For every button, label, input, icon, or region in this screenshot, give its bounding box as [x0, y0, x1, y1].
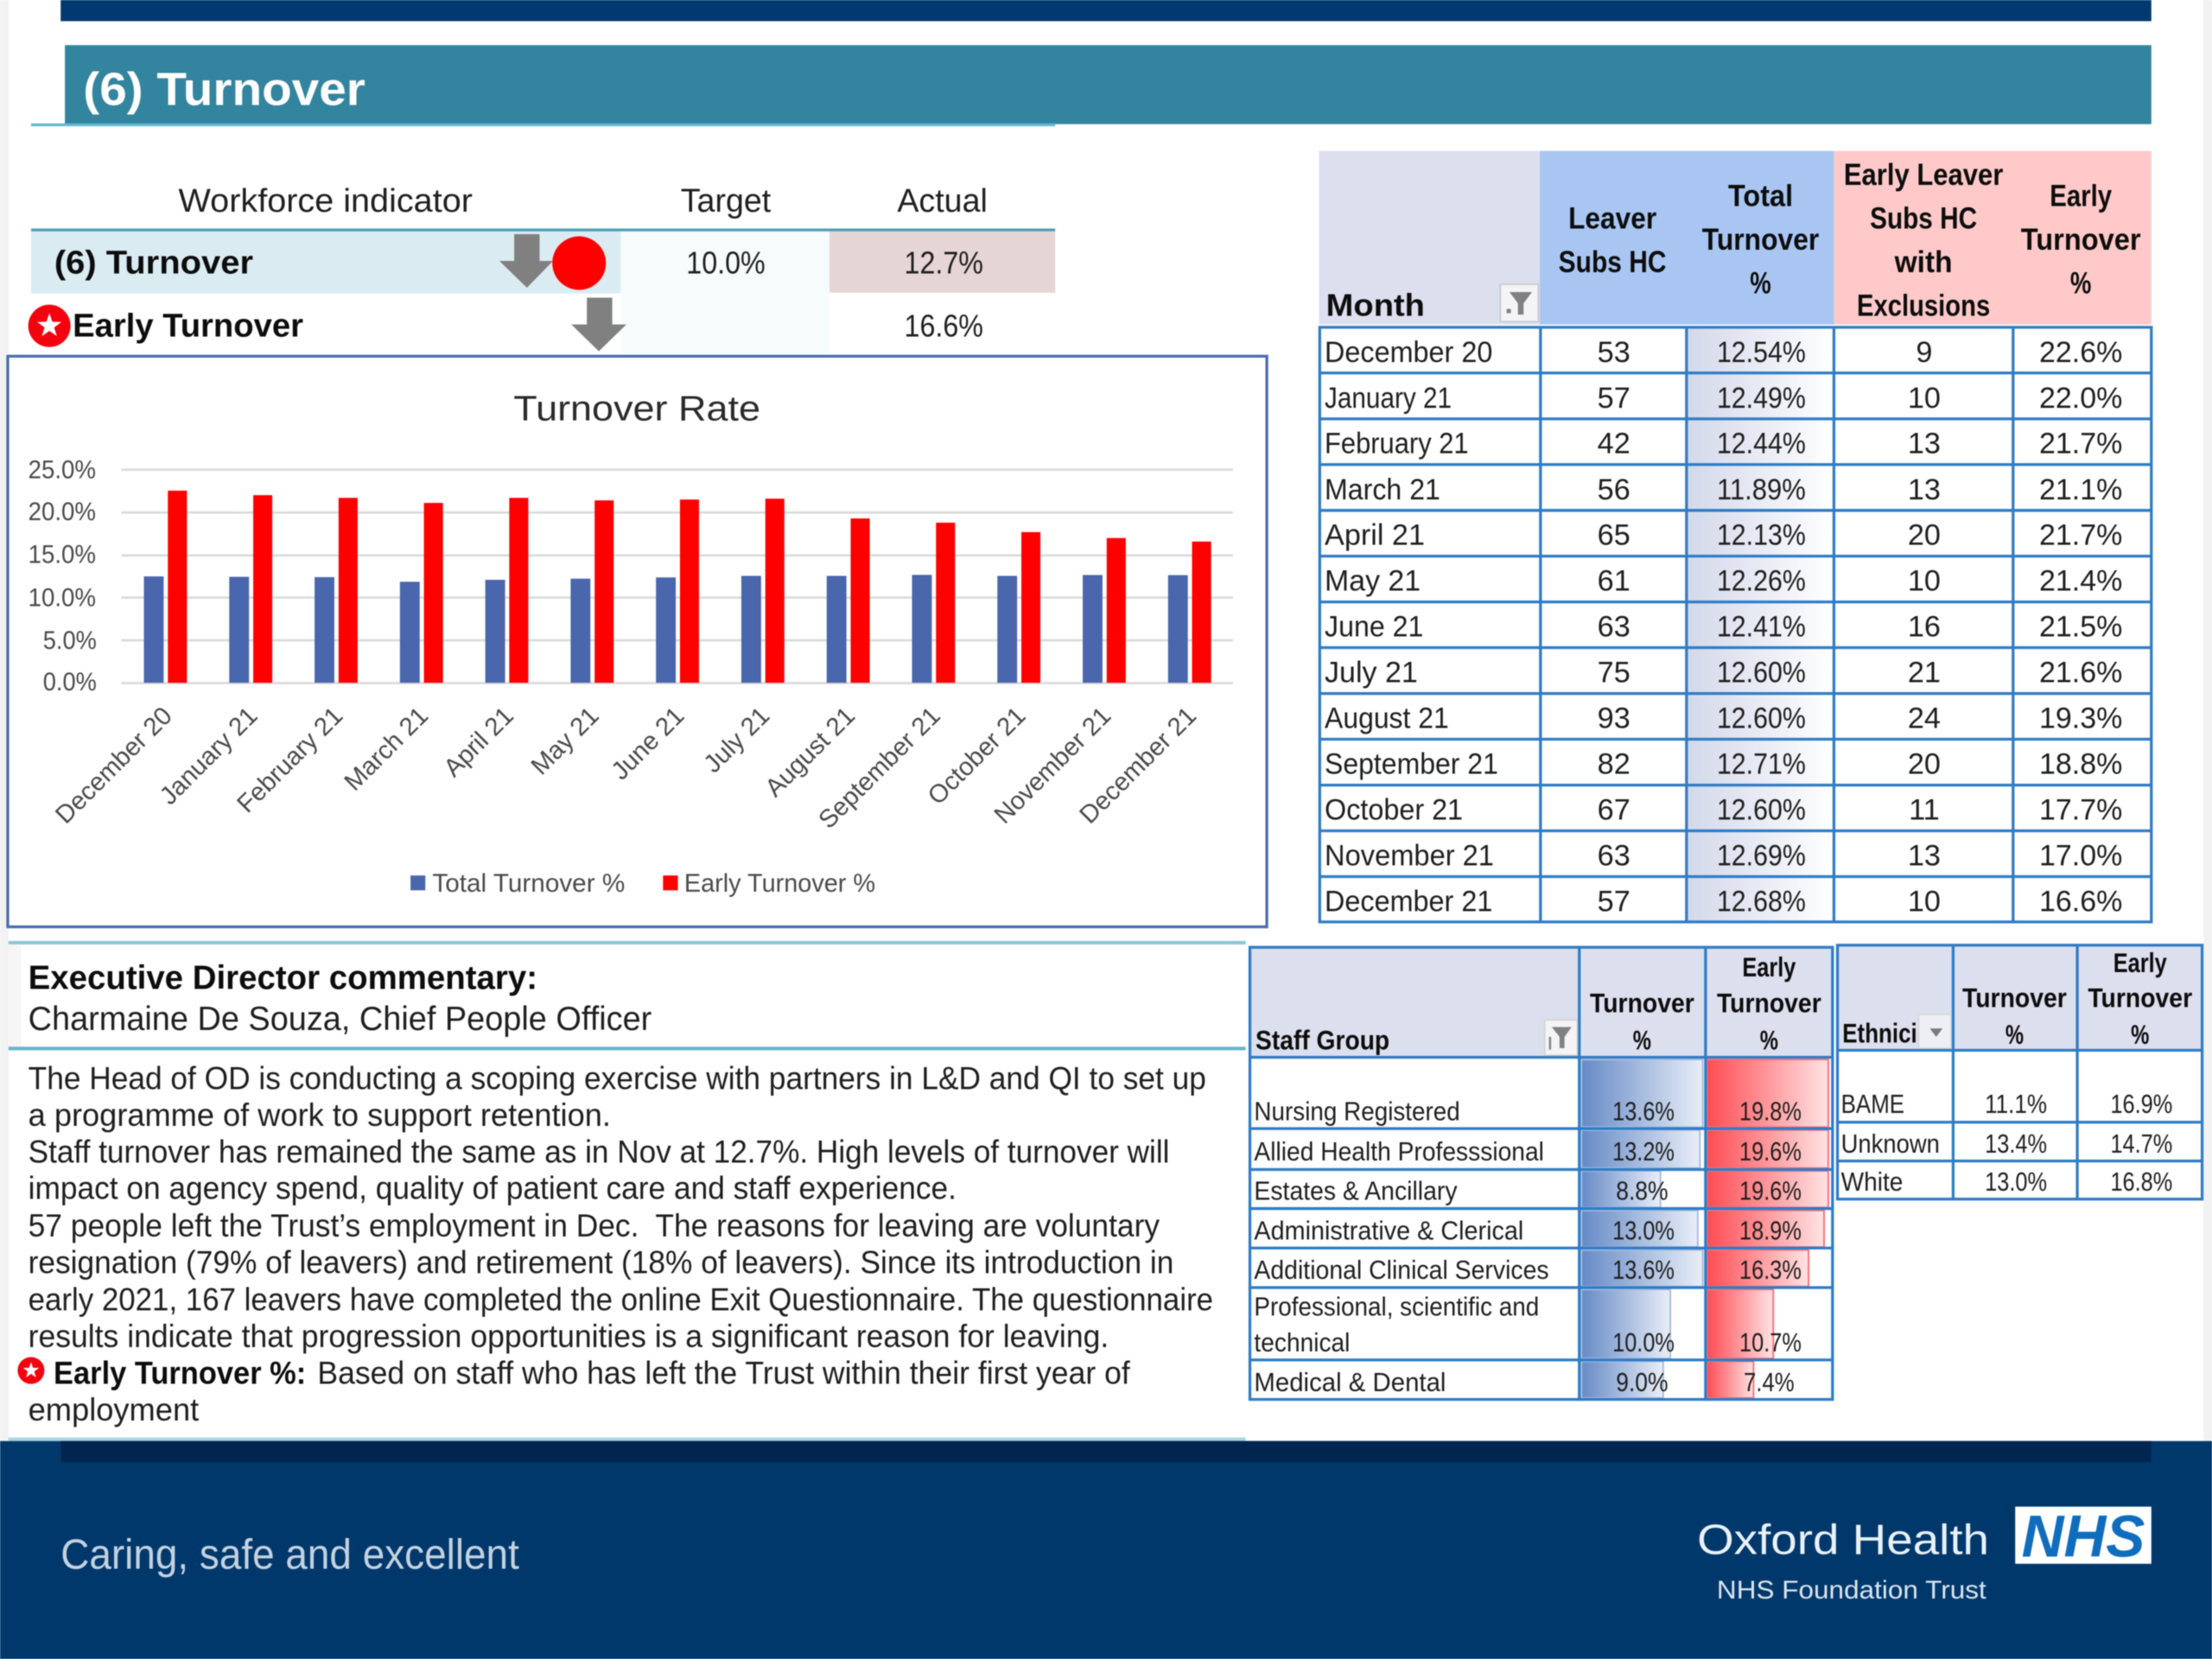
- table rows: 65: [1598, 519, 1630, 552]
- table rows: Nursing Registered: [1254, 1097, 1460, 1126]
- y axis labels: 5.0%: [43, 626, 97, 655]
- table rows: 24: [1908, 702, 1941, 735]
- table rows: March 21: [1325, 474, 1440, 506]
- table rows: 13: [1908, 840, 1941, 873]
- x axis labels: December 21: [1074, 702, 1202, 830]
- table rows: September 21: [1325, 748, 1498, 781]
- table rows: August 21: [1325, 702, 1449, 735]
- commentary body text: impact on agency spend, quality of patient care and staff experience.: [29, 1171, 957, 1206]
- table rows: 16.8%: [2110, 1168, 2172, 1197]
- table rows: 13.2%: [1612, 1138, 1675, 1166]
- table rows: 21.5%: [2039, 611, 2122, 644]
- table rows: White: [1841, 1168, 1903, 1197]
- commentary body text: The Head of OD is conducting a scoping exercise with partners in L&D and QI to set up: [29, 1060, 1206, 1096]
- header cells: with: [1894, 245, 1953, 279]
- y axis labels: 25.0%: [29, 455, 96, 484]
- tagline: Caring, safe and excellent: [60, 1532, 519, 1579]
- header text: [1255, 951, 1821, 1056]
- y axis labels: 15.0%: [29, 540, 96, 569]
- y axis labels: 0.0%: [43, 668, 97, 696]
- organisation name: [1697, 1516, 1989, 1605]
- table rows: 13.6%: [1612, 1256, 1675, 1285]
- table rows: 17.7%: [2039, 794, 2122, 827]
- icon: filter button: [1545, 1020, 1577, 1055]
- x axis labels: June 21: [606, 702, 690, 785]
- table rows: 7.4%: [1744, 1369, 1795, 1397]
- table rows: 57: [1598, 382, 1630, 415]
- table rows: 12.26%: [1717, 565, 1806, 598]
- table rows: 20: [1908, 519, 1941, 552]
- header cells: Early Leaver: [1844, 158, 2004, 192]
- column headers: Target: [681, 182, 772, 219]
- table rows: 21.7%: [2039, 519, 2122, 552]
- header cells: Leaver: [1568, 201, 1656, 235]
- row: turnover: 12.7%: [905, 245, 983, 281]
- table rows: 12.13%: [1717, 519, 1806, 552]
- table rows: 21.7%: [2039, 428, 2122, 461]
- header cells: Subs HC: [1559, 245, 1667, 279]
- row: early turnover: [29, 297, 983, 352]
- table rows: 19.6%: [1739, 1178, 1802, 1206]
- table rows: 21.4%: [2039, 565, 2122, 598]
- header text: Early: [2113, 947, 2167, 978]
- table rows: 93: [1598, 702, 1630, 735]
- table grid: [1250, 947, 1833, 1400]
- x axis labels: April 21: [438, 702, 519, 783]
- table rows: Estates & Ancillary: [1254, 1178, 1458, 1206]
- table rows: Administrative & Clerical: [1254, 1217, 1523, 1245]
- x axis labels: January 21: [154, 702, 264, 810]
- table rows: 57: [1598, 886, 1630, 918]
- organisation name: Oxford Health: [1697, 1516, 1989, 1563]
- x axis labels: September 21: [813, 702, 946, 835]
- header text: %: [2131, 1019, 2149, 1050]
- y axis labels: [29, 455, 97, 696]
- commentary body text: a programme of work to support retention.: [29, 1097, 611, 1133]
- panel: monthly table: [1319, 151, 2152, 922]
- table rows: Professional, scientific and: [1254, 1293, 1539, 1321]
- table rows: April 21: [1325, 519, 1425, 552]
- commentary body text: [29, 1060, 1213, 1427]
- table rows: 21: [1908, 657, 1941, 690]
- table rows: 13.0%: [1985, 1168, 2047, 1197]
- header cells: %: [2070, 267, 2091, 301]
- table rows: 19.3%: [2039, 702, 2122, 735]
- table rows: 14.7%: [2110, 1130, 2172, 1159]
- table rows: 12.44%: [1717, 428, 1806, 461]
- table rows: 10: [1908, 565, 1941, 598]
- table rows: 10.7%: [1739, 1329, 1802, 1357]
- table rows: 9.0%: [1616, 1369, 1669, 1397]
- icon: star badge: [17, 1357, 44, 1384]
- grid lines: [121, 470, 1233, 683]
- NHS logo: NHS: [2022, 1503, 2145, 1570]
- x axis labels: August 21: [760, 702, 861, 803]
- header text: Turnover: [1717, 987, 1821, 1018]
- header text: Turnover: [1962, 982, 2067, 1014]
- header text: Early: [1742, 951, 1796, 982]
- table rows: 12.60%: [1717, 702, 1806, 735]
- table rows: 16: [1908, 611, 1941, 644]
- x axis labels: July 21: [698, 702, 775, 779]
- header cells: Turnover: [1702, 223, 1820, 257]
- table rows: 9: [1916, 336, 1932, 369]
- table rows: 82: [1598, 748, 1630, 781]
- table rows: 12.60%: [1717, 657, 1806, 690]
- legend: [410, 869, 875, 898]
- table rows: December 21: [1325, 886, 1492, 918]
- column headers: Actual: [897, 182, 988, 219]
- table rows: 10: [1908, 382, 1941, 415]
- x axis labels: March 21: [339, 702, 434, 797]
- series: total turnover bars: [144, 575, 1188, 683]
- table rows: January 21: [1325, 382, 1452, 415]
- panel: workforce indicator: [29, 182, 1055, 353]
- commentary body text: Staff turnover has remained the same as in Nov at 12.7%. High levels of turnover will: [29, 1134, 1169, 1169]
- table rows: 22.6%: [2039, 336, 2122, 369]
- header text: %: [2005, 1019, 2024, 1050]
- table rows: [1841, 1090, 2172, 1197]
- table rows: 13.0%: [1612, 1217, 1675, 1245]
- turnover data bars: [1581, 1059, 1703, 1398]
- column headers: Workforce indicator: [179, 182, 473, 219]
- panel: ethnicity table: [1838, 945, 2202, 1199]
- table rows: 42: [1598, 428, 1630, 461]
- table rows: July 21: [1325, 657, 1418, 690]
- table rows: February 21: [1325, 428, 1469, 461]
- row: early turnover: 16.6%: [905, 308, 983, 343]
- x axis labels: November 21: [988, 702, 1116, 830]
- table rows: 56: [1598, 474, 1630, 506]
- header text: Turnover: [2088, 982, 2192, 1014]
- header text: Ethnici: [1842, 1018, 1917, 1049]
- row: early turnover: Early Turnover: [73, 307, 303, 343]
- table rows: 22.0%: [2039, 382, 2122, 415]
- table rows: 63: [1598, 840, 1630, 873]
- table rows: 18.9%: [1739, 1217, 1802, 1245]
- header cells: Month: [1326, 288, 1425, 323]
- icon: dropdown button: [1918, 1014, 1951, 1048]
- commentary body text: Early Turnover %:: [54, 1356, 306, 1391]
- table rows: 12.49%: [1717, 382, 1806, 415]
- table rows: 16.6%: [2039, 886, 2122, 918]
- y axis labels: 10.0%: [29, 584, 96, 613]
- chart title: Turnover Rate: [513, 389, 760, 429]
- panel: turnover rate chart: [8, 356, 1267, 927]
- x axis labels: February 21: [232, 702, 348, 818]
- table rows: 10.0%: [1612, 1329, 1675, 1357]
- title banner: [31, 45, 2152, 126]
- top bar: [60, 0, 2152, 21]
- table rows: 8.8%: [1616, 1178, 1669, 1206]
- table rows: June 21: [1325, 611, 1423, 644]
- table rows: 12.60%: [1717, 794, 1806, 827]
- x axis labels: October 21: [922, 702, 1032, 810]
- header cells: [1319, 151, 2152, 325]
- commentary body text: Based on staff who has left the Trust within their first year of: [317, 1356, 1131, 1391]
- table rows: 12.41%: [1717, 611, 1806, 644]
- row: turnover: 10.0%: [686, 245, 766, 281]
- table rows: Unknown: [1841, 1130, 1940, 1159]
- column headers: [179, 182, 988, 219]
- table rows: 18.8%: [2039, 748, 2122, 781]
- header cells: Subs HC: [1870, 201, 1977, 235]
- icon: star badge: [29, 305, 71, 347]
- header text: %: [1633, 1025, 1651, 1056]
- icon: filter button: [1500, 284, 1538, 321]
- legend: Early Turnover %: [684, 869, 875, 898]
- table rows: technical: [1254, 1329, 1350, 1357]
- title: (6) Turnover: [83, 64, 365, 116]
- header text: Staff Group: [1255, 1025, 1389, 1056]
- header cells: %: [1750, 267, 1771, 301]
- header text: %: [1760, 1025, 1778, 1056]
- table rows: 19.6%: [1739, 1138, 1802, 1166]
- table rows: Medical & Dental: [1254, 1369, 1446, 1397]
- table rows: 20: [1908, 748, 1941, 781]
- y axis labels: 20.0%: [29, 498, 96, 526]
- x axis labels: May 21: [525, 702, 605, 780]
- commentary heading: [29, 959, 652, 1038]
- organisation name: NHS Foundation Trust: [1717, 1576, 1986, 1605]
- table rows: 63: [1598, 611, 1630, 644]
- table rows: October 21: [1325, 794, 1463, 827]
- header cells: Exclusions: [1857, 289, 1990, 323]
- series: early turnover bars: [168, 491, 1211, 683]
- table rows: May 21: [1325, 565, 1421, 598]
- header cells: Turnover: [2021, 223, 2141, 257]
- header text: Turnover: [1590, 987, 1694, 1018]
- early turnover data bars: [1707, 1059, 1828, 1398]
- table rows: 12.54%: [1717, 336, 1806, 369]
- panel: staff group table: [1250, 947, 1833, 1400]
- commentary body text: employment: [29, 1392, 199, 1427]
- commentary body text: early 2021, 167 leavers have completed the online Exit Questionnaire. The questionnaire: [29, 1282, 1213, 1318]
- table rows: December 20: [1325, 336, 1492, 369]
- table rows: Allied Health Professsional: [1254, 1138, 1544, 1166]
- table rows: 61: [1598, 565, 1630, 598]
- table rows: 11.1%: [1985, 1090, 2047, 1119]
- table rows: November 21: [1325, 840, 1494, 873]
- table rows: 12.71%: [1717, 748, 1806, 781]
- table rows: [1254, 1097, 1802, 1397]
- commentary body text: 57 people left the Trust’s employment in Dec. The reasons for leaving are voluntary: [29, 1208, 1160, 1243]
- table rows: 11.89%: [1717, 474, 1806, 506]
- table rows: 21.1%: [2039, 474, 2122, 506]
- row: turnover: (6) Turnover: [54, 245, 253, 281]
- table rows: 16.9%: [2110, 1090, 2172, 1119]
- table grid: [1319, 327, 2152, 922]
- x axis labels: [50, 702, 1202, 835]
- x axis labels: December 20: [50, 702, 178, 830]
- legend: Total Turnover %: [432, 869, 625, 898]
- table grid: [1838, 945, 2202, 1199]
- table rows: 10: [1908, 886, 1941, 918]
- table rows: 16.3%: [1739, 1256, 1802, 1285]
- table rows: 21.6%: [2039, 657, 2122, 690]
- table rows: 13: [1908, 474, 1941, 506]
- table rows: 75: [1598, 657, 1630, 690]
- header cells: Total: [1728, 179, 1793, 213]
- table rows: 17.0%: [2039, 840, 2122, 873]
- header cells: Early: [2050, 179, 2112, 213]
- commentary heading: Charmaine De Souza, Chief People Officer: [29, 1001, 652, 1038]
- table rows: 67: [1598, 794, 1630, 827]
- footer: [0, 1441, 2212, 1659]
- table rows: 12.69%: [1717, 840, 1806, 873]
- table rows: 13: [1908, 428, 1941, 461]
- table rows: [1325, 336, 2122, 918]
- commentary heading: Executive Director commentary:: [29, 959, 537, 996]
- table rows: 19.8%: [1739, 1097, 1802, 1126]
- panel: executive director commentary: [9, 941, 1246, 1441]
- table rows: 53: [1598, 336, 1630, 369]
- table rows: 13.6%: [1612, 1097, 1675, 1126]
- commentary body text: resignation (79% of leavers) and retirement (18% of leavers). Since its introduction in: [29, 1244, 1173, 1280]
- header text: [1842, 947, 2192, 1050]
- table rows: BAME: [1841, 1090, 1904, 1119]
- table rows: 12.68%: [1717, 886, 1806, 918]
- commentary body text: results indicate that progression opportunities is a significant reason for leaving.: [29, 1319, 1109, 1354]
- table rows: 13.4%: [1985, 1130, 2047, 1159]
- table rows: 11: [1909, 794, 1940, 827]
- row: turnover: [54, 234, 983, 290]
- table rows: Additional Clinical Services: [1254, 1256, 1549, 1285]
